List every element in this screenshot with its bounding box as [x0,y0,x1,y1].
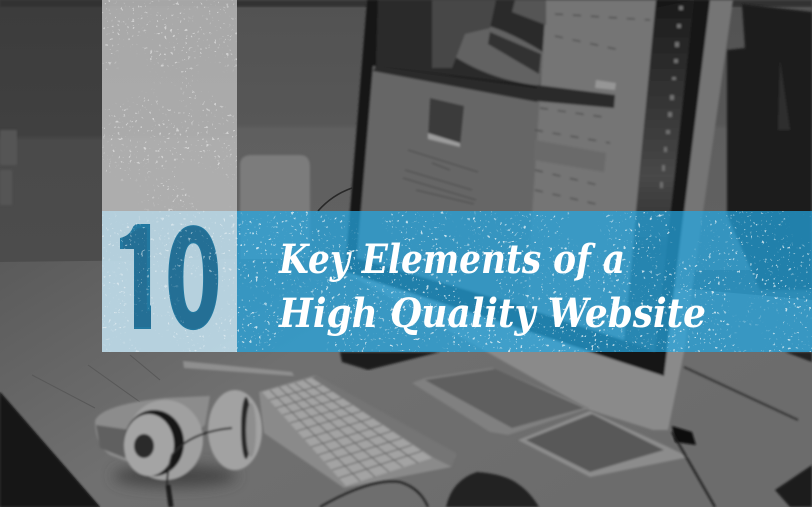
left ear cup [127,400,203,480]
translucent column above number box [102,0,237,211]
title line 2: High Quality Website [278,290,706,337]
wall side object [0,130,17,205]
sidebar panel [624,0,694,352]
monitor stand [412,368,696,477]
monitor body [345,0,733,290]
monitor chin [345,272,692,430]
right ear cup [208,390,262,470]
screen button [595,80,616,90]
keyboard body [259,375,456,488]
speaker grille [134,434,154,458]
number 10 [120,224,218,330]
right background monitor [727,4,812,290]
monitor cable [672,432,715,507]
desk surface [0,258,812,507]
headphones cable [167,428,232,490]
black bezel [345,0,710,376]
screen: dark hero image [376,0,546,86]
corner object [775,465,812,507]
hero: laptop in photo [452,20,543,86]
digit 1: 1 [114,168,164,367]
speckle on column and number box [102,0,237,352]
main monitor [345,0,733,430]
paper lines on desk [32,355,160,408]
wall left [0,0,240,270]
phone [340,352,440,370]
keyboard [259,375,456,488]
blue title band [237,211,812,352]
keyboard rear bar [312,375,456,467]
rear stand foot [412,368,590,435]
headband [95,396,210,470]
mouse cable [320,482,428,507]
mouse [446,472,539,507]
mouse and cables [320,352,812,507]
rear foot reflection [425,369,584,428]
headphones [95,390,262,507]
key gaps [269,380,422,481]
white cube object [240,155,310,262]
desk front edge [0,392,100,507]
cable behind monitor [318,188,352,211]
wall right [237,0,812,270]
speckle on band [237,211,812,352]
top shadow strip [0,0,812,7]
cable plug [672,426,696,445]
page heading text lines [403,150,478,204]
highlighted row [534,140,606,172]
table rows [535,14,650,205]
title line 1: Key Elements of a [278,236,625,283]
front stand foot [518,411,689,477]
headband inner [96,425,130,458]
headphones shadow [113,465,237,487]
light blue number box [102,211,237,352]
back corner shadow [785,352,812,362]
screen: right page [526,0,656,340]
title text [278,236,706,337]
digit 0: 0 [165,169,222,368]
page thumbnail [428,98,464,147]
key area [262,378,432,486]
pen [183,361,294,376]
screen: left page [357,66,540,308]
sidebar icons [660,6,683,188]
screen: dark bar across pages [373,66,537,102]
front foot reflection [526,414,664,472]
desk cable [684,367,798,420]
